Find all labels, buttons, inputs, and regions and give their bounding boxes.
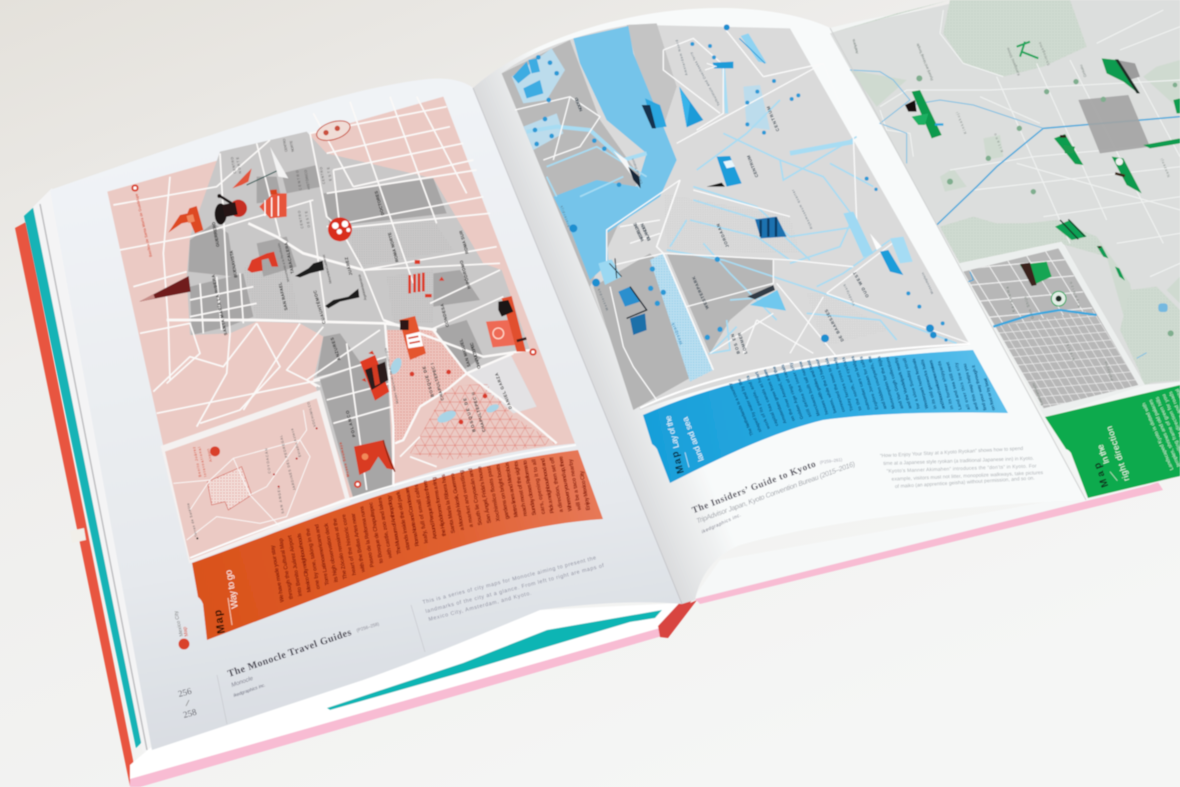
column dividers <box>217 605 425 724</box>
band body text: Around Parque México there <box>423 480 439 540</box>
inset: southern Mexico City: International <box>197 446 208 477</box>
icon: red palace <box>259 189 287 218</box>
district labels: BOSQUE DE <box>462 397 477 433</box>
north dotted parks <box>512 48 770 150</box>
page numbers: 258 <box>182 707 198 720</box>
band title: Map <box>1092 461 1111 489</box>
band body text: Enjoy Mexico City <box>579 469 592 511</box>
band body text: Land and sea still meet <box>945 361 963 410</box>
band body text: beams, while the IJ harbour <box>814 358 838 414</box>
band body text: and the Vondelpark nearby <box>893 356 913 409</box>
caption: The Monocle Travel Guides: The Monocle Travel Guides <box>226 627 353 680</box>
band body text: find your way through it <box>971 364 988 411</box>
description text <box>880 446 1044 490</box>
district labels: BOS EN <box>730 333 741 355</box>
district labels: BUENAVISTA <box>228 249 238 278</box>
band body text: and Van Gogh collections <box>884 356 904 409</box>
inset: central Kyoto: Nishiki <box>1065 341 1076 361</box>
icon: red church <box>168 206 203 233</box>
map: Amsterdam <box>502 23 970 410</box>
band body text <box>727 355 996 437</box>
band title: land and sea <box>680 415 706 463</box>
district labels: CHAPULTEPEC I <box>429 363 445 401</box>
side label: Mexico City Map: Map <box>182 626 190 637</box>
band body text <box>270 456 592 603</box>
band body text: Torre Latinoamericana and <box>314 523 331 586</box>
map labels: Arashiyama <box>851 38 859 54</box>
caption: The Insiders' Guide to Kyoto: (P259–261) <box>819 457 843 465</box>
district labels: CUAUHTÉMOC <box>312 290 327 324</box>
icon: luchador mask <box>328 217 352 241</box>
district labels: Ángel de la Independencia <box>357 274 368 301</box>
band body text: Sunday closes Reforma to <box>522 459 538 516</box>
band body text: Westerpark hosts festivals <box>911 357 929 409</box>
district labels: CENTRO <box>297 210 304 229</box>
icon: mariachi figure <box>215 194 247 225</box>
district labels: CENTRO <box>230 156 237 174</box>
icon: Kinkaku pavilion <box>905 90 943 138</box>
band body text: The Museum of Anthropology <box>386 494 403 555</box>
band body text: work of its people, and its <box>745 374 771 431</box>
double rule above orange band <box>190 445 576 558</box>
icon: light blue west gate <box>598 258 622 285</box>
district labels: Museumplein <box>921 272 934 295</box>
band body text: a Moorish kiosk, Guerrero <box>450 472 466 531</box>
inset: central Kyoto: Kiyomizu <box>1069 281 1082 308</box>
north shore land <box>627 23 677 127</box>
rivers <box>850 70 1180 358</box>
district labels: CENTRUM <box>765 105 780 132</box>
right page edge shadow <box>830 28 1086 500</box>
band body text: for a slow Sunday stroll <box>902 357 921 409</box>
inset: southern Mexico City: Airport <box>206 448 213 462</box>
map base <box>502 25 970 410</box>
map labels: Kinkakuji <box>955 111 968 134</box>
band body text: Xochimilco floats past <box>486 465 502 522</box>
band body text: Wherever you end up, there <box>558 456 574 512</box>
district labels: WESTERPARK <box>691 275 710 310</box>
inset: southern Mexico City: SAN ÁNGEL <box>276 487 285 514</box>
panel: left page <box>50 79 682 750</box>
icon: red column monument <box>408 260 444 297</box>
band body text: its high observation deck <box>323 522 340 583</box>
location markers <box>569 24 937 342</box>
band body text: Metro lines and Metrobús <box>504 462 520 518</box>
district labels: Rijksmuseum quarter <box>791 188 814 230</box>
caption: The Insiders' Guide to Kyoto: ikedgraphics inc. <box>701 512 742 534</box>
district labels: SAN RAFAEL <box>277 282 289 311</box>
district labels: Museo Soumaya <box>338 441 350 477</box>
district labels: Monumento a Cuauhtémoc <box>321 254 333 284</box>
band body text: leafy, full of small cafés <box>414 484 430 544</box>
icon: anthropology museum <box>360 351 389 401</box>
band body text: The Zócalo remains at the <box>332 518 349 580</box>
district labels: HIPÓDROMO <box>459 259 472 289</box>
icon: north east green temple <box>1102 58 1140 93</box>
band body text: Amsterdam grew from a dam <box>762 368 788 424</box>
band body text: reach most of the sights <box>513 461 529 517</box>
band body text: Paseo de la Reforma runs <box>359 506 376 568</box>
band body text: Mexico City neighbourhoods <box>297 533 313 593</box>
inset: central Kyoto: Karasuma <box>1005 285 1016 312</box>
district labels: CONDESA <box>439 302 450 328</box>
side label: Mexico City Map: Mexico City <box>173 610 185 637</box>
district labels: Westpark <box>670 321 684 345</box>
caption: The Monocle Travel Guides: Monocle <box>231 676 255 689</box>
Chapultepec section I <box>387 330 467 443</box>
band body text: Roma Norte and Condesa are <box>405 487 421 547</box>
band body text: heart of the historic core <box>341 514 358 576</box>
map labels: Kamigamo Shrine <box>1006 47 1021 76</box>
band body text: capital has canals at heart <box>754 371 779 427</box>
district labels: NORTE <box>235 156 242 174</box>
band body text: Golden Age rings of canals <box>780 363 804 420</box>
district labels: Tolhuistuin and Overhoeks ferry <box>689 51 721 106</box>
band body text: We have made your stay <box>270 544 286 603</box>
district labels: ROMA NORTE <box>387 232 400 263</box>
west harbour land <box>502 40 640 410</box>
icon: red arch monument <box>247 252 278 273</box>
district labels: Vondelpark <box>842 283 856 306</box>
district labels: GUERRERO <box>211 221 220 247</box>
band body text: in its former shipyards <box>936 360 954 410</box>
map base <box>830 0 1180 385</box>
icon: lower west dotted buildings <box>618 287 647 335</box>
icon: south pagoda group <box>1055 219 1087 240</box>
district labels: HISTÓRICO <box>303 169 311 190</box>
district labels: NOORD <box>573 97 584 112</box>
band body text: South lie Coyoacán and <box>468 467 484 526</box>
road network <box>880 10 1180 277</box>
icon: Eye film museum <box>642 98 667 128</box>
district labels: Museo Nacional de Antropología <box>384 348 399 404</box>
description text: “Kyoto’s Manner Akimahen” introduces the “don’ts” in Kyoto. For <box>887 463 1037 475</box>
district labels: Basílica de Santa María de Guadalupe <box>134 193 153 257</box>
band body text: will be a taco nearby <box>568 458 583 512</box>
district labels: ANZURES <box>329 337 342 361</box>
band body text: to the north, and cyclists <box>840 356 863 411</box>
central districts <box>187 132 537 498</box>
band body text: gardens on bright boats <box>495 464 511 520</box>
description text: “How to Enjoy Your Stay at a Kyoto Ryokan” shows how to spend <box>880 446 1023 459</box>
water <box>553 26 677 280</box>
band body text: Merchants built tall narrow <box>797 360 821 417</box>
district labels: NORTE <box>289 140 295 152</box>
description text: Mexico City, Amsterdam, and Kyoto. <box>428 591 532 623</box>
band body text: into Benito Juárez Airport <box>287 534 304 597</box>
band body text: shaped by water and by the <box>736 378 763 433</box>
green dot texture <box>830 0 1180 383</box>
teal page wedge <box>327 610 662 710</box>
pink cover edge left <box>130 628 662 787</box>
district labels: TABACALERA <box>283 241 295 274</box>
icon: top sign block <box>739 33 767 63</box>
map: Mexico City <box>107 97 575 563</box>
caption: The Insiders' Guide to Kyoto: TripAdvisor Japan, Kyoto Convention Bureau (2015–2016) <box>696 461 856 525</box>
caption: The Monocle Travel Guides: (P256–258) <box>356 621 380 633</box>
map labels: Nanzenji <box>1160 158 1171 178</box>
upper gray district <box>1117 60 1140 82</box>
description text: time at a Japanese style ryokan (a traditional Japanese inn) in Kyoto. <box>883 456 1034 467</box>
tree markers <box>533 42 948 342</box>
icon: orange building <box>486 296 527 352</box>
roads <box>515 27 970 400</box>
band body text: stands inside the old park <box>395 490 412 551</box>
band body text: with the Bellas Artes near <box>351 512 367 574</box>
district labels: Monumento a la Revolución <box>277 242 290 282</box>
tree markers <box>916 75 1177 336</box>
district labels: WESTELIJKE <box>632 222 645 242</box>
band title: In the <box>1095 443 1111 465</box>
band body text: all over this low city <box>953 362 971 410</box>
band body text: Santa María la Ribera has <box>441 474 457 534</box>
district labels: CENTRO <box>282 138 288 152</box>
band body text: and this map helps you <box>962 363 979 411</box>
district labels <box>134 138 513 477</box>
band body text: to Bosque de Chapultepec <box>368 502 385 564</box>
district labels: EILANDEN <box>639 223 652 242</box>
icon: central green temple <box>1112 157 1142 193</box>
icon: blue wedge building <box>679 87 703 127</box>
teal page edge <box>24 207 146 748</box>
band title: Lay of the <box>663 414 681 449</box>
bottom white page block <box>130 603 680 782</box>
band body text: The Netherlands is a country <box>727 382 754 437</box>
band body text: on foot or by boat <box>982 377 996 411</box>
panel: blue text band <box>643 350 1008 483</box>
band body text: the Hipódromo forms a ring <box>432 476 448 537</box>
caption: The Insiders' Guide to Kyoto: The Insiders’ Guide to Kyoto <box>691 459 818 516</box>
Jordaan district <box>663 193 800 253</box>
band title: Map <box>212 609 228 635</box>
page numbers <box>177 686 198 720</box>
Daniel Garza light district <box>467 353 537 413</box>
inset: southern Mexico City: Torres de Satélite <box>186 503 198 537</box>
band body text: a market and wrestling <box>459 469 475 528</box>
icon: skull <box>314 117 352 144</box>
Chapultepec section II <box>410 383 557 460</box>
map labels: Kitano <box>993 133 1004 153</box>
description text: example, visitors must not litter, monopolize walkways, take pictures <box>891 470 1044 483</box>
icon: north island buildings <box>513 58 543 98</box>
band title: Way to go <box>223 569 241 609</box>
third page <box>830 0 1180 500</box>
district labels: Westerdok <box>597 288 609 311</box>
map base <box>107 97 575 560</box>
road network <box>113 97 557 490</box>
inset: southern Mexico City: Benito Juárez <box>192 446 202 477</box>
district labels: CENTRUM <box>746 154 759 178</box>
panel: orange text band <box>192 450 603 640</box>
mountain greens <box>830 0 1180 385</box>
dotted district blocks <box>243 220 453 323</box>
map labels: Ryoanji and Ninnaji Temple <box>916 43 934 81</box>
icon: Anne Frank blocks <box>755 217 787 238</box>
district labels: LOMMER <box>736 331 748 355</box>
district labels: CHAPULTEPEC <box>469 342 482 370</box>
band body text: through the Cultural Map <box>278 537 295 600</box>
band body text: with castle, zoo and lakes <box>377 497 394 560</box>
band body text: and hidden courtyards, the <box>867 355 888 410</box>
icon: ferry <box>613 151 641 190</box>
page numbers: 256 <box>177 686 193 699</box>
inset: central Kyoto <box>958 242 1145 417</box>
canals <box>527 67 957 353</box>
description text: landmarks of the city at a glance. From left to right are maps of <box>425 563 605 615</box>
band body text: in its old gasworks halls <box>919 358 938 410</box>
band body text: and Noord welcomes makers <box>928 359 946 410</box>
icon: tower <box>139 276 191 302</box>
band body text: Museumplein for the Rijks <box>876 355 896 409</box>
central gray district <box>1078 95 1150 153</box>
red tree markers <box>410 370 487 424</box>
band body text: houses with gables and hoist <box>806 359 829 415</box>
west district <box>593 253 710 410</box>
icon: small temples <box>1097 246 1125 281</box>
district labels: JORDAAN <box>715 223 730 248</box>
district labels: CENTRO <box>319 166 326 185</box>
band body text: Today ferries cross freely <box>832 356 854 412</box>
page gutter shadow <box>473 88 682 604</box>
district labels: OESTE <box>304 210 311 228</box>
icon: top blue block <box>705 62 733 70</box>
inset: central Kyoto: Kawaramachi <box>1031 382 1044 406</box>
district labels: SAN MIGUEL <box>458 338 472 368</box>
dark district blocks <box>188 165 483 498</box>
band body text: Landscaped Kyoto is dotted with <box>1141 401 1175 471</box>
icon: central station block <box>707 156 742 187</box>
inset: central Kyoto: Gion Shijo <box>1023 296 1035 319</box>
inset: southern Mexico City: Estadio Azteca <box>290 428 302 457</box>
map: Kyoto <box>830 0 1180 417</box>
band title <box>212 569 241 635</box>
district labels: SANTA MARÍA LA RIBERA <box>210 273 228 336</box>
caption: The Monocle Travel Guides: ikedgraphics inc. <box>233 682 266 698</box>
district labels: ROMA SUR <box>458 229 470 254</box>
panel: third page <box>830 0 1180 498</box>
district labels: Sloterdijk <box>559 205 571 228</box>
district labels: DOCTORES <box>373 190 385 216</box>
icon: central west temple <box>1054 134 1083 165</box>
band body text: one by one, taking in the <box>305 528 322 590</box>
district labels: Amsterdam Noord <box>675 39 689 76</box>
panel: right page <box>473 8 1086 604</box>
band body text: connected the town to Asia <box>824 357 846 413</box>
park strip <box>650 253 713 382</box>
district labels: CENTRO <box>295 170 303 191</box>
band body text: still define the inner city <box>788 361 813 418</box>
icon: black statue two <box>325 289 359 308</box>
rule above blue band <box>640 344 970 408</box>
inset: southern Mexico City: XOCHIMILCO <box>306 401 317 427</box>
band body text: Explore Jordaan for cafés <box>858 355 879 410</box>
description text: of maiko (an apprentice geisha) without permission, and so on. <box>895 475 1035 490</box>
band title <box>1092 425 1131 489</box>
map labels: Shimogamo <box>1038 41 1051 66</box>
Oud West district <box>807 293 890 347</box>
inset: central Kyoto: Pontocho <box>1104 361 1114 381</box>
metro markers <box>131 184 537 488</box>
band body text: outnumber cars on bridges <box>850 355 871 410</box>
icon: crane logo <box>1017 42 1038 58</box>
band title <box>663 414 706 475</box>
district labels: JUÁREZ <box>344 256 353 276</box>
band body text: on the river Amstel, and the <box>771 365 796 422</box>
icon: Soumaya vase <box>354 440 395 475</box>
Westerpark district <box>667 253 773 353</box>
band body text: Pick a neighbourhood and <box>540 457 556 514</box>
right page block <box>690 480 1160 603</box>
icon: east light blue buildings <box>843 212 913 275</box>
side label: Mexico City Map <box>173 610 190 650</box>
band body text: cars, opening it to all <box>531 458 547 515</box>
panel: green text band <box>1045 385 1180 498</box>
icon: Flags and Torre <box>232 147 288 188</box>
district labels: BOSQUE DE <box>421 366 435 398</box>
district labels: Centraal Station <box>631 158 644 184</box>
inset: southern Mexico City: COYOACÁN <box>264 448 272 474</box>
icon: pyramid building <box>747 285 786 311</box>
icon: east gate with arm <box>1143 98 1180 148</box>
inset: southern Mexico City <box>161 390 351 563</box>
pink cover edge right <box>695 482 1163 604</box>
band title: Map <box>670 450 687 475</box>
icon: Chapultepec castle <box>399 316 426 360</box>
district labels: DANIEL GARZA <box>493 371 513 410</box>
district labels: POLANCO <box>345 409 357 438</box>
district labels: CHAPULTEPEC II <box>470 392 487 433</box>
district labels <box>559 39 934 355</box>
inset: southern Mexico City: JARDINES DEL PEDREGAL <box>279 435 297 491</box>
district labels: OUD WEST <box>852 271 870 299</box>
white ribbon tab <box>70 528 86 543</box>
band body text: San Ángel, Frida's house <box>476 466 493 524</box>
red spine corner <box>658 597 697 638</box>
band title: right direction <box>1104 425 1131 482</box>
district labels: DE BAARSJES <box>824 308 845 343</box>
left page stack <box>33 188 152 752</box>
caption: The Monocle Travel Guides <box>226 621 380 698</box>
icon: black statue one <box>295 261 324 277</box>
red cover edge <box>15 222 135 786</box>
stack shadow line <box>40 204 147 750</box>
district labels: ESTE <box>326 166 333 181</box>
description text: This is a series of city maps for Monocle aiming to present the <box>422 555 597 606</box>
band body text: a direction, then set off <box>549 456 565 513</box>
lakes <box>388 356 500 425</box>
map labels: Ginkaku <box>1079 64 1088 78</box>
map labels <box>851 38 1171 178</box>
